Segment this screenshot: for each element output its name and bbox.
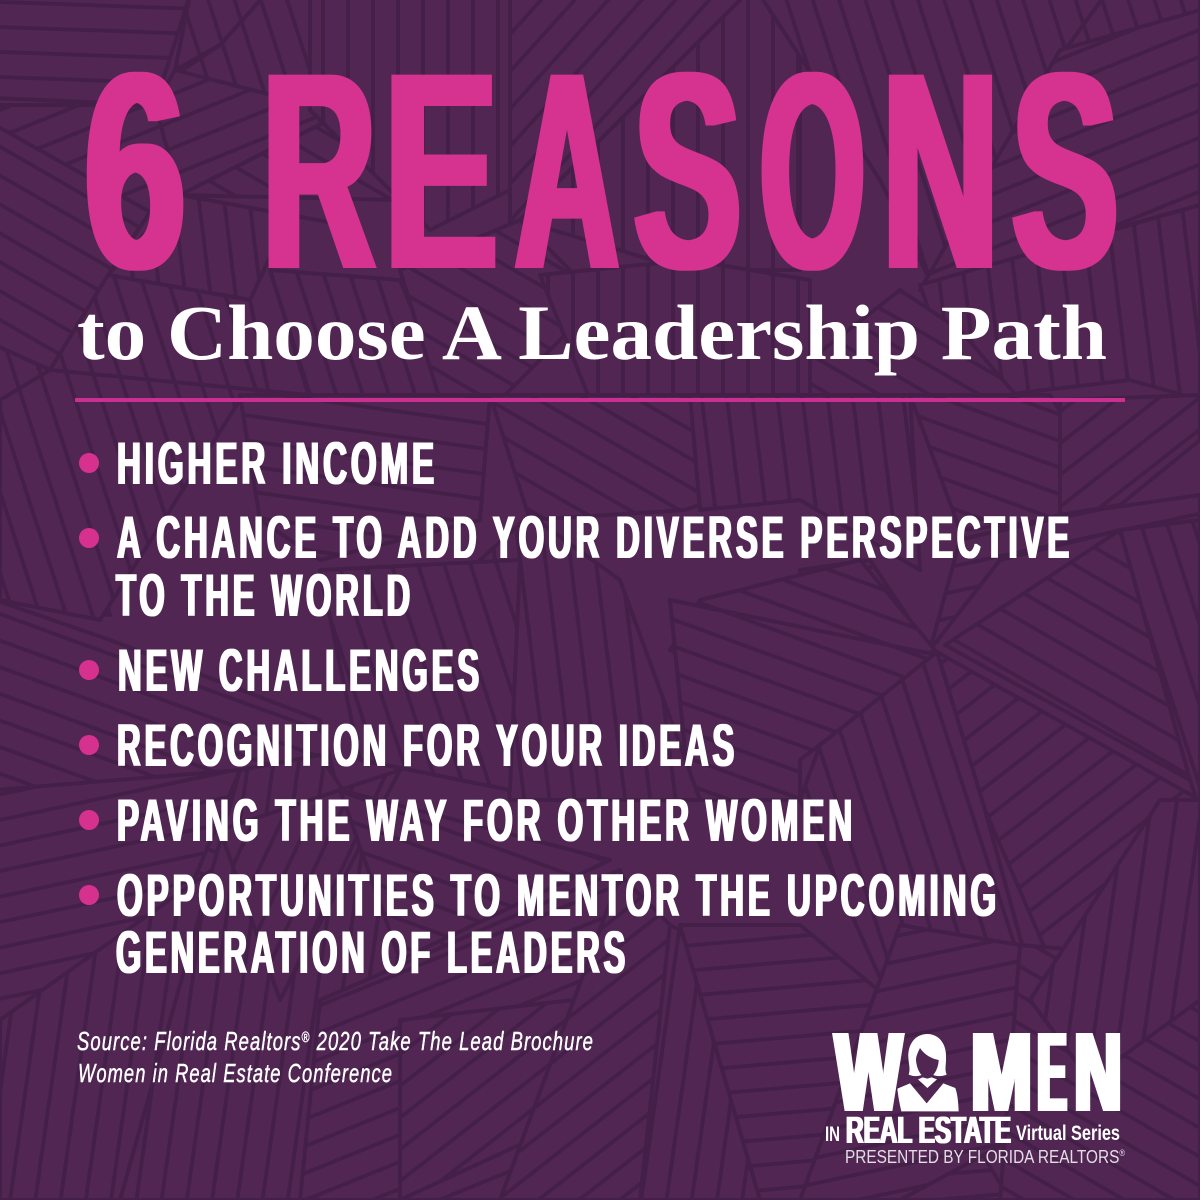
title: 6 REASONS: O [760, 14, 865, 328]
logo wordmark: N [1074, 1009, 1122, 1135]
bullet 1: higher income [79, 430, 438, 497]
title: 6 REASONS [84, 14, 1118, 328]
title: 6 REASONS: S [1012, 14, 1118, 328]
logo: Women in Real Estate: REAL ESTATE [846, 1110, 1011, 1152]
source note [77, 1026, 594, 1088]
bullet 3: new challenges [79, 637, 483, 704]
title: 6 REASONS: A [515, 14, 619, 328]
logo wordmark: W [835, 1009, 902, 1135]
logo wordmark: E [1038, 1009, 1066, 1135]
source note: Women in Real Estate Conference [78, 1058, 393, 1088]
title: 6 REASONS: S [634, 14, 742, 328]
bullet 5: paving the way [79, 787, 856, 854]
subtitle: to Choose A Leadership Path [77, 289, 1107, 376]
bullet 2: diverse perspective: TO THE WORLD [116, 562, 414, 629]
title: 6 REASONS: 6 [84, 14, 186, 328]
icon: woman silhouette [897, 1034, 959, 1111]
bullet 4: recognition [79, 712, 738, 779]
source note: 2020 Take The Lead Brochure [310, 1026, 594, 1056]
divider rule [75, 398, 1125, 402]
bullet 6: mentoring [79, 862, 1000, 986]
source note: ® [302, 1029, 310, 1046]
title: 6 REASONS: N [882, 14, 999, 328]
logo: Women in Real Estate: PRESENTED BY FLORIDA REALTORS [845, 1147, 1166, 1167]
logo: Women in Real Estate: ® [1119, 1148, 1125, 1158]
reasons list [79, 430, 1073, 986]
source note: Source: Florida Realtors [77, 1026, 393, 1056]
title: 6 REASONS: E [384, 14, 498, 328]
logo: Women in Real Estate: Virtual Series [1016, 1122, 1120, 1145]
title: 6 REASONS: R [262, 14, 376, 328]
logo wordmark [835, 1009, 1122, 1135]
bullet 6: mentoring: GENERATION OF LEADERS [116, 919, 629, 986]
logo wordmark: M [971, 1009, 1032, 1135]
bullet 3: new challenges: NEW CHALLENGES [118, 637, 483, 704]
logo: Women in Real Estate: IN [825, 1123, 840, 1146]
bullet 2: diverse perspective [79, 504, 1073, 629]
logo: Women in Real Estate [825, 1009, 1125, 1167]
bullet 1: higher income: HIGHER INCOME [117, 430, 438, 497]
